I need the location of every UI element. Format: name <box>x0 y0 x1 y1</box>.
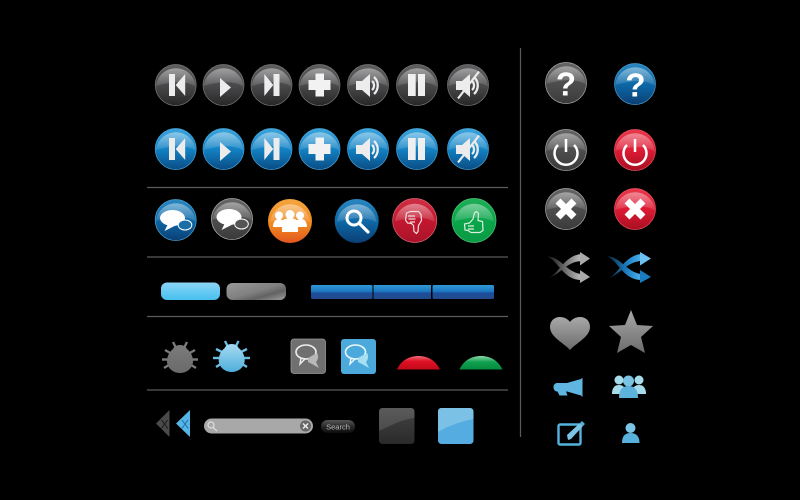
icon: blue back-x arrow <box>176 410 190 437</box>
icon: blue shuffle <box>607 252 651 283</box>
social buttons row <box>155 198 496 243</box>
icon: gray question <box>546 62 586 104</box>
icon: star <box>609 310 653 353</box>
icon: gray square chat <box>291 339 326 374</box>
blue media buttons row <box>155 128 488 170</box>
icon: gray question: ? <box>556 66 576 102</box>
icon: blue question: ? <box>625 66 646 104</box>
icon: green dome <box>460 356 502 370</box>
icon: red power <box>614 130 656 170</box>
dark glossy square <box>379 408 414 444</box>
search field <box>204 418 313 434</box>
dividers <box>147 48 520 437</box>
icon: user <box>622 423 640 443</box>
icon: thumbs up <box>452 198 496 242</box>
icon: blue square chat <box>341 339 376 374</box>
icon: blue back-x arrow: X <box>181 418 189 432</box>
pills and segmented bar <box>161 282 494 300</box>
gray media buttons row <box>155 64 488 106</box>
icon: blue chat <box>155 200 196 240</box>
icon: edit <box>558 421 585 444</box>
icon: thumbs down <box>393 198 437 242</box>
icon: red close <box>614 188 656 230</box>
icon: gray bug <box>162 342 198 373</box>
light blue pill <box>161 282 220 300</box>
search button: Search <box>326 422 350 432</box>
blue glossy square <box>438 408 474 444</box>
gray pill <box>226 283 286 300</box>
right column round buttons <box>546 62 656 230</box>
icon: blue question <box>614 64 656 104</box>
icon: gray back-x arrow: X <box>160 418 169 432</box>
icon: heart <box>550 317 590 350</box>
icon: blue bug <box>213 341 250 372</box>
icon: red dome <box>397 356 440 370</box>
icon: gray power <box>546 130 586 170</box>
search button <box>321 420 355 433</box>
icon: gray close <box>546 188 586 230</box>
icon: gray back-x arrow <box>156 410 170 437</box>
icon: orange group <box>268 199 312 243</box>
icon: gray shuffle <box>547 252 590 283</box>
icon: gray chat <box>212 198 252 240</box>
segmented progress bar <box>311 285 494 299</box>
icon: search <box>335 199 379 243</box>
icon: megaphone <box>553 378 582 397</box>
icon: people <box>612 376 646 398</box>
